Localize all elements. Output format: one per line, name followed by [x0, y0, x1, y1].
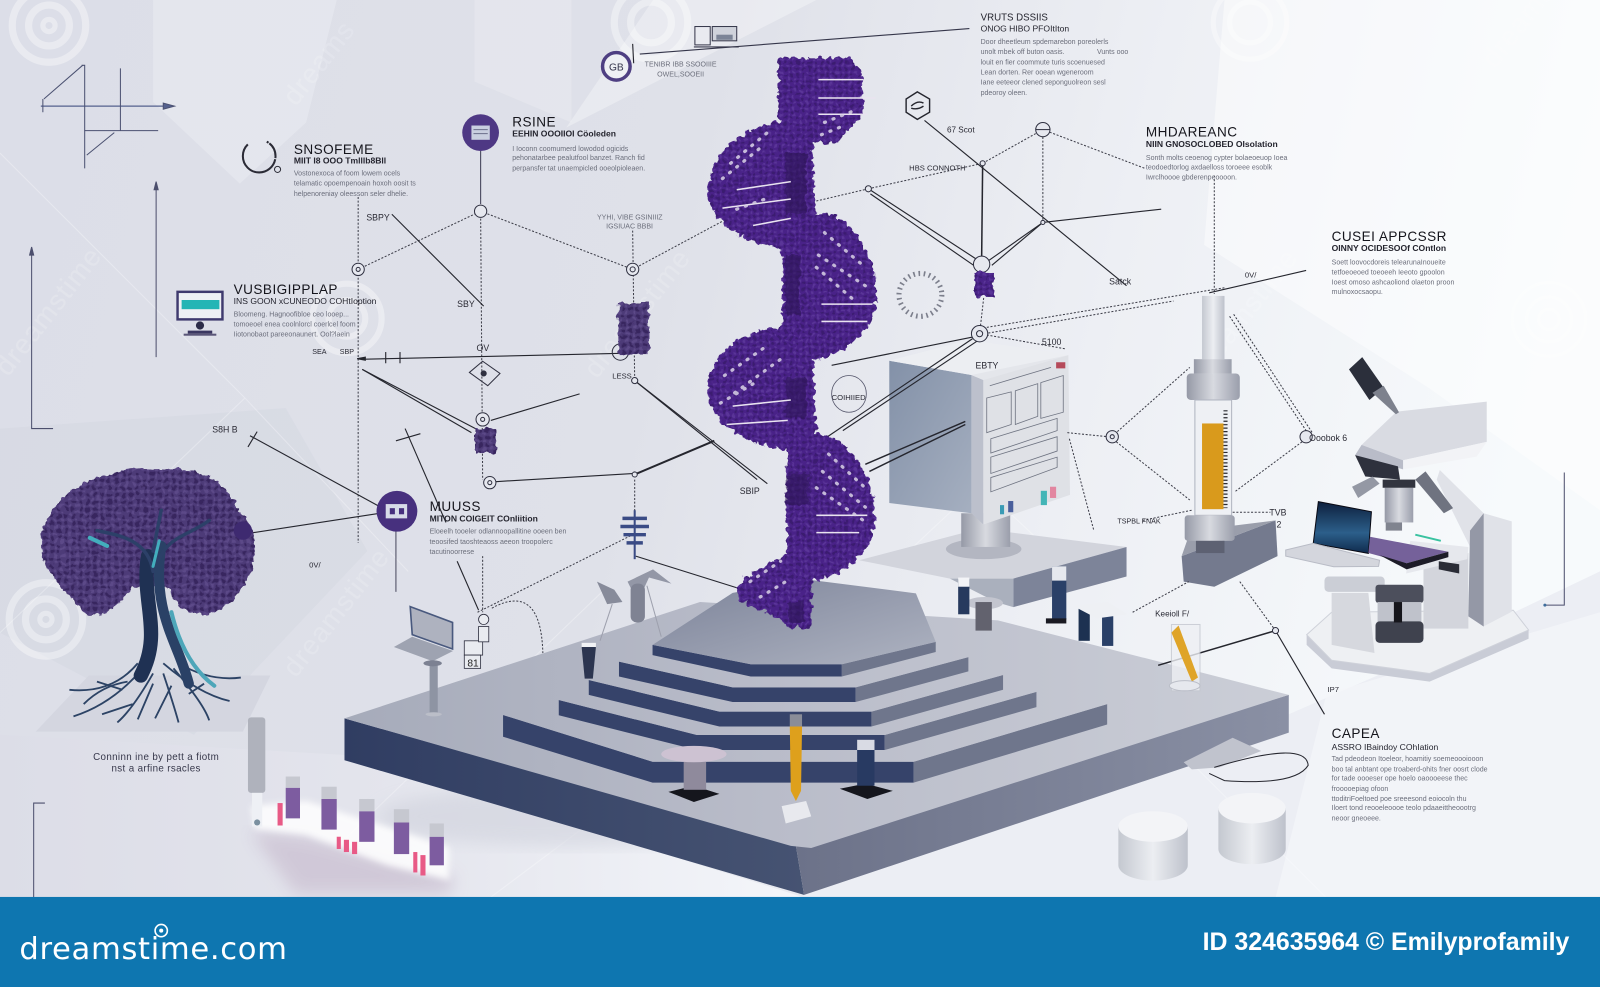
tube reflection: [250, 832, 454, 894]
white glow: [251, 801, 449, 880]
text: MUUSS: tacutinoorrese: [430, 549, 474, 556]
text: MUUSS: teoosifed taoshteaoss aeeon troopolerc: [430, 539, 553, 546]
tree caption: nst a arfine rsacles: [112, 763, 201, 774]
text: CAPEA: for tade oooeser ope hoelo oaoooeese thec: [1332, 776, 1468, 783]
tree: [36, 468, 270, 732]
icon: GB badge: [603, 53, 630, 80]
watermark: dreamstime pattern: dreams: [276, 15, 361, 111]
canopy: [42, 468, 255, 615]
text: CAPEA: Tad pdeodeon Itoeleor, hoamitiy soemeoooiooon: [1332, 756, 1483, 763]
dark spine shading: [786, 153, 808, 622]
small tubes on platform right: [958, 566, 1128, 646]
text: VUSBIGIPPLAP: VUSBIGIPPLAP: [234, 282, 338, 297]
text: GB caption: TENIBR IBB SSOOIIIE: [645, 61, 717, 68]
screen interface: [987, 367, 1063, 492]
white cylinders: [1118, 793, 1286, 881]
arm pillar: [1437, 470, 1512, 627]
text: CUSEI APPCSSR: Soett loovocdoreis telearunaInoueite: [1332, 259, 1446, 266]
small annotation labels: 0V/: [1245, 271, 1257, 280]
text: CAPEA: Iloert tond reooeleoooe teolo pdaaeittheoootrg: [1332, 805, 1476, 812]
text: RSINE: I Ioconn coomumerd lowodod ogicids: [512, 146, 629, 153]
liquid syringe tube: [1182, 296, 1278, 587]
dreamstime logo: dreamstime.com: [19, 932, 288, 967]
lab stand icon: [597, 569, 671, 641]
text: CUSEI APPCSSR: OINNY OCIDESOOf COntlon: [1332, 243, 1446, 253]
footer banner: [0, 897, 1600, 987]
text: VUSBIGIPPLAP: tomoeoel enea coolnlorcl coerlcel foom: [234, 322, 356, 329]
yellow rod in beaker: [1169, 624, 1200, 691]
small annotation labels: HBS CONNOTH: [909, 163, 966, 172]
roots: [69, 663, 241, 722]
step tier 5: [503, 633, 1107, 783]
text: VRUTS DSSIIS: VRUTS DSSIIS: [981, 12, 1048, 23]
text: CAPEA: neoor gneoeee.: [1332, 815, 1381, 822]
purple block mid: [474, 429, 496, 453]
icon: document badge: [462, 114, 499, 151]
navy sample tube: [840, 740, 893, 799]
COIHIIED ellipse: [832, 376, 866, 412]
lobe speckle: [720, 110, 867, 597]
text: GB caption: OWEL,SOOEII: [657, 72, 704, 79]
icon: data badge: [377, 491, 417, 532]
text: CAPEA: frooooepiag ofoon: [1332, 786, 1388, 793]
text: CAPEA: ttoditriFoeltoed poe sreeesond eoiocoln thu: [1332, 796, 1467, 803]
tree caption: [93, 752, 219, 774]
laptop on stand: [394, 607, 453, 716]
text: SNSOFEME: helpenoreniay oleesson seler dhelie.: [294, 191, 408, 198]
cylinder left: [1118, 811, 1188, 881]
text: RSINE: [512, 115, 645, 172]
small annotation labels: SBY: [457, 299, 475, 309]
text: RSINE: EEHIN OOOIIOI Cöoleden: [512, 129, 616, 139]
blue leaf sprig: [620, 510, 649, 559]
screen bar icons: [1000, 362, 1065, 514]
text: SNSOFEME: SNSOFEME: [294, 142, 374, 157]
tree caption: Conninn ine by pett a fiotm: [93, 752, 219, 763]
top tier: [653, 580, 936, 677]
text: MUUSS: Eloeelh tooeler odlannoopallitine ooeen ben: [430, 529, 567, 536]
text: CAPEA: ASSRO IBaindoy COhIation: [1332, 742, 1438, 752]
rungs highlights: [722, 80, 876, 533]
tree floor: [36, 676, 270, 732]
small annotation labels: EBTY: [976, 360, 999, 370]
text: CUSEI APPCSSR: CUSEI APPCSSR: [1332, 229, 1447, 244]
small annotation labels: 5100: [1042, 337, 1061, 347]
small annotation labels: SBP: [340, 348, 354, 356]
icon: GB badge: GB: [609, 62, 624, 73]
trunk: [90, 510, 214, 686]
icon: desktop monitor: [178, 292, 222, 336]
small chart sketch: [464, 614, 489, 669]
small annotation labels: Satck: [1109, 277, 1132, 287]
text: GB caption: [645, 61, 717, 79]
text: VRUTS DSSIIS: pdeoroy oleen.: [981, 90, 1027, 97]
hexagonal stepped platform: [344, 580, 1289, 895]
text: MHDAREANC: NIIN GNOSOCLOBED OIsolation: [1146, 139, 1278, 149]
top eyepiece: [1349, 357, 1399, 414]
cylinder right: [1218, 793, 1286, 864]
text: MHDAREANC: MHDAREANC: [1146, 125, 1237, 140]
purple cluster left: [618, 303, 649, 354]
dark beaker on step: [582, 643, 596, 679]
canopy node: [234, 521, 252, 540]
laptop screen: [1313, 502, 1371, 553]
connector nodes: [352, 122, 1312, 634]
text: VRUTS DSSIIS: unolt mbek off buton oasis.: [981, 49, 1065, 56]
text: VRUTS DSSIIS: Door dheetleum spdemarebon poreolerls: [981, 39, 1109, 46]
text: RSINE: perpansfer tat unaempicled ooeolpioleaen.: [512, 165, 645, 172]
small annotation labels: IGSIUAC BBBI: [606, 224, 653, 231]
server cabinet with screen: [889, 340, 1070, 559]
small annotation labels: IP7: [1328, 685, 1339, 694]
text: VRUTS DSSIIS: Lean dorten. Rer ooean wgeneroom: [981, 69, 1094, 76]
text: MHDAREANC: [1146, 125, 1288, 182]
watermark: dreamstime pattern: dreamstime: [276, 542, 396, 682]
small annotation labels: Keeioll F/: [1155, 609, 1190, 618]
small annotation labels: OV: [477, 343, 489, 353]
DNA double helix: [713, 63, 876, 624]
text: CUSEI APPCSSR: mulnoxocsaopu.: [1332, 289, 1383, 296]
test tube row: [248, 717, 454, 894]
small annotation labels: COIHIIED: [832, 393, 866, 402]
microscope base: [1307, 610, 1529, 682]
text: VRUTS DSSIIS: Vunts ooo: [1097, 49, 1128, 56]
text: VRUTS DSSIIS: [981, 12, 1128, 97]
text: MUUSS: MITON COIGEIT COnIiition: [430, 513, 538, 523]
text: CAPEA: boo tal anbtant ope troaberd-ohits fner oosrt clode: [1332, 766, 1488, 773]
floor shadow under platform: [378, 786, 765, 847]
small annotation labels: 0V/: [309, 560, 322, 569]
step tier 3: [589, 628, 1003, 727]
top left axis diagram: [41, 65, 174, 168]
text: CAPEA: [1332, 726, 1488, 822]
stage white: [1406, 541, 1468, 573]
small annotation labels: S8H B: [212, 425, 238, 435]
text: CUSEI APPCSSR: tetfoeoeoed toeoeeh Ieeoto gpoolon: [1332, 269, 1445, 276]
small annotation labels: SEA: [312, 348, 327, 356]
icon: hexagon badge: [906, 92, 930, 119]
microscope: [1286, 357, 1529, 682]
small annotation labels: LESS: [612, 372, 632, 381]
small annotation labels: TSPBL FNAK: [1117, 517, 1161, 525]
monitor pedestal: [859, 529, 1127, 607]
watermark: dreamstime pattern: dreamstime: [577, 243, 697, 383]
text: CAPEA: CAPEA: [1332, 726, 1380, 741]
text: SNSOFEME: Vostonexoca of foom lowem ocels: [294, 171, 401, 178]
small annotation labels: Ooobok 6: [1309, 433, 1347, 443]
text: MHDAREANC: teodoedtorlog axdaelloss toroeee esoblk: [1146, 164, 1273, 171]
small annotation labels: 67 Scot: [947, 126, 975, 135]
objective lens: [1352, 471, 1453, 531]
solid connector network: [248, 29, 1324, 714]
text: MHDAREANC: Sonth molts ceoenog cypter bolaeoeuop Ioea: [1146, 155, 1288, 162]
text: CUSEI APPCSSR: Ioest omoso ashcaoliond olaeton proon: [1332, 280, 1454, 287]
text: MHDAREANC: Iwrclhoooe gbderenpeoooon.: [1146, 175, 1237, 182]
helix body: [713, 63, 871, 624]
small annotation labels: [212, 126, 1347, 694]
text: VUSBIGIPPLAP: Bloomeng. Hagnoofibloe ceo looep...: [234, 311, 349, 318]
grey tube: [248, 717, 265, 827]
flask sketch icon: [469, 361, 500, 386]
floating molecule clusters: [469, 272, 994, 559]
step tier 2: [619, 612, 968, 702]
text: MUUSS: [430, 499, 567, 556]
yellow pipette: [782, 714, 811, 823]
head: [1362, 402, 1487, 460]
keyboard tray: [1286, 543, 1380, 567]
dotted connector network: [358, 130, 1312, 653]
text: SNSOFEME: telamatic opoempenoain hoxoh oosit ts: [294, 181, 416, 188]
watermark: dreamstime pattern: dreamstime: [1184, 243, 1304, 383]
small chart sketch: 81: [467, 658, 479, 669]
tall vertical arrows: [30, 182, 1564, 898]
small annotation labels: TVB: [1269, 507, 1287, 517]
purple stage: [1368, 537, 1448, 563]
icon: ring gauge: [243, 140, 281, 172]
text: VUSBIGIPPLAP: [234, 282, 377, 339]
image credit: ID 324635964 © Emilyprofamily: [1203, 928, 1570, 956]
platform base: [344, 602, 1289, 895]
text: CUSEI APPCSSR: [1332, 229, 1454, 296]
text: RSINE: pehonatarbee pealutfool banzet. Ranch fid: [512, 155, 645, 162]
text: VRUTS DSSIIS: Iane eeteeor clened seponguolreon sesl: [981, 80, 1106, 87]
small annotation labels: SBIP: [740, 486, 760, 496]
text: SNSOFEME: MIIT I8 OOO Tmlllb8Bll: [294, 155, 386, 165]
column and dials: [1332, 593, 1374, 653]
back block: [1423, 553, 1468, 629]
small annotation labels: SBPY: [366, 212, 390, 222]
mushroom stool: [661, 746, 727, 802]
text: RSINE: RSINE: [512, 115, 556, 130]
step tier 4: [559, 633, 1036, 750]
purple block right: [974, 272, 994, 297]
icon: small workstation: [694, 27, 739, 47]
text: VRUTS DSSIIS: louit en fier coommute turis scoenuesed: [981, 59, 1105, 66]
text: MUUSS: MUUSS: [430, 499, 481, 514]
dotted molecule: [899, 273, 942, 316]
text: VRUTS DSSIIS: ONOG HIBO PFOItIton: [981, 24, 1069, 34]
text: VUSBIGIPPLAP: INS GOON xCUNEODO COHtIoption: [234, 296, 377, 306]
cable probe: [1184, 738, 1308, 782]
text: VUSBIGIPPLAP: Iiotonobaot pareeonaunert. Ool?laein: [234, 332, 350, 339]
text: SNSOFEME: [294, 142, 416, 198]
small annotation labels: YYHI, VIBE GSINIIIZ: [597, 214, 663, 221]
small annotation labels: 2: [1277, 520, 1282, 530]
